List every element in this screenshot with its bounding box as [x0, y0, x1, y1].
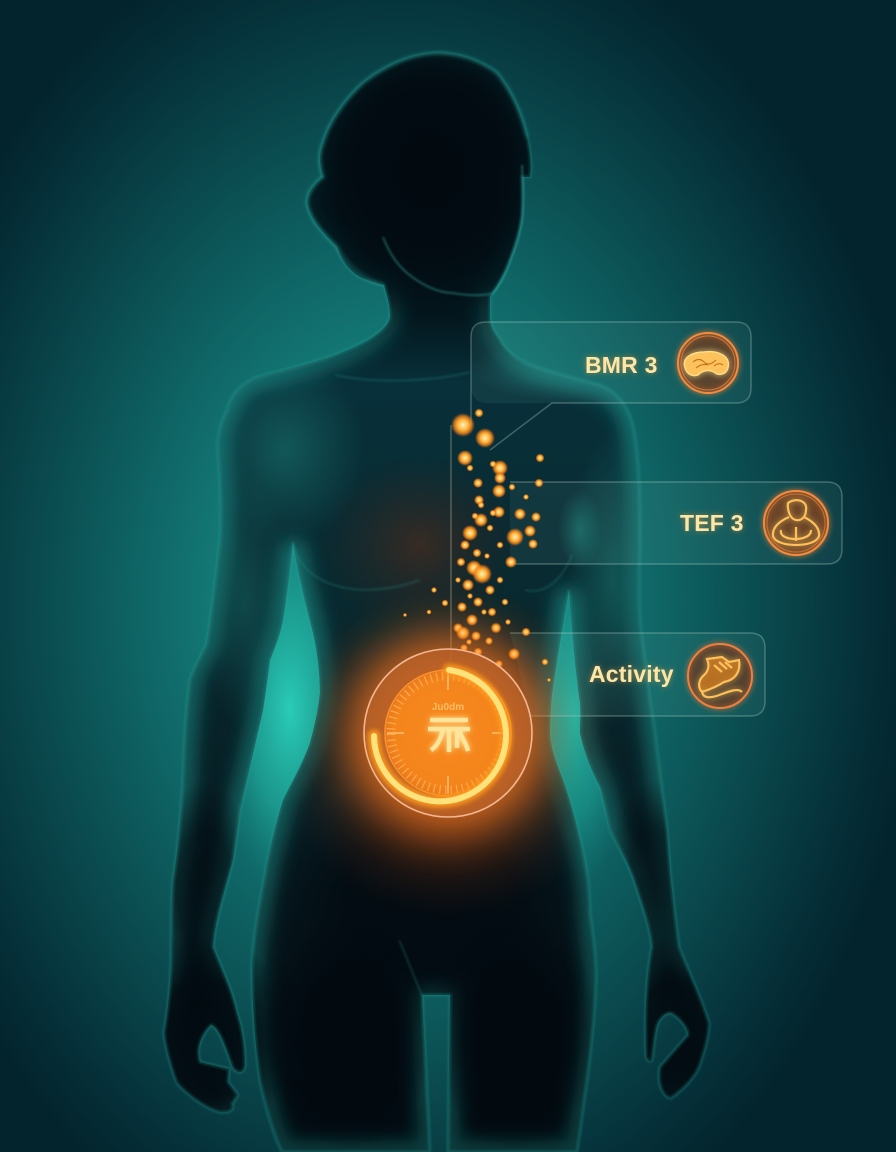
panel: Activity	[510, 633, 765, 716]
gauge dial	[350, 635, 546, 831]
chest and upper arm tint	[230, 382, 349, 526]
label: Activity: Activity	[589, 661, 674, 687]
gauge progress arc	[374, 670, 506, 801]
dark forearms and hands	[172, 797, 238, 965]
connector: spine line	[450, 425, 452, 660]
rim inner glow	[164, 192, 709, 1152]
icon: person with bowl	[764, 491, 828, 555]
warm chest glow	[344, 476, 497, 612]
label: TEF 3: TEF 3	[680, 510, 744, 536]
jaw and face contour	[383, 165, 523, 295]
head shadow	[318, 56, 531, 285]
gauge outer ring	[364, 649, 532, 817]
gauge ticks	[391, 676, 505, 790]
gauge small text: Ju0dm	[432, 702, 464, 713]
gauge central symbol	[428, 720, 470, 752]
warm belly glow	[300, 600, 600, 902]
label: BMR 3: BMR 3	[585, 352, 658, 378]
body silhouette	[162, 50, 711, 1152]
dark abdomen and legs	[322, 830, 538, 1012]
icon: shoe	[688, 644, 752, 708]
particles	[403, 408, 551, 682]
panel: TEF	[510, 482, 842, 564]
gauge glow	[350, 635, 546, 831]
icon: brain	[678, 333, 738, 393]
panel: BMR	[471, 322, 751, 450]
gauge face	[384, 669, 512, 797]
glow between arm and torso	[215, 520, 635, 900]
hair rim	[307, 53, 527, 285]
body contour lines	[293, 372, 572, 995]
